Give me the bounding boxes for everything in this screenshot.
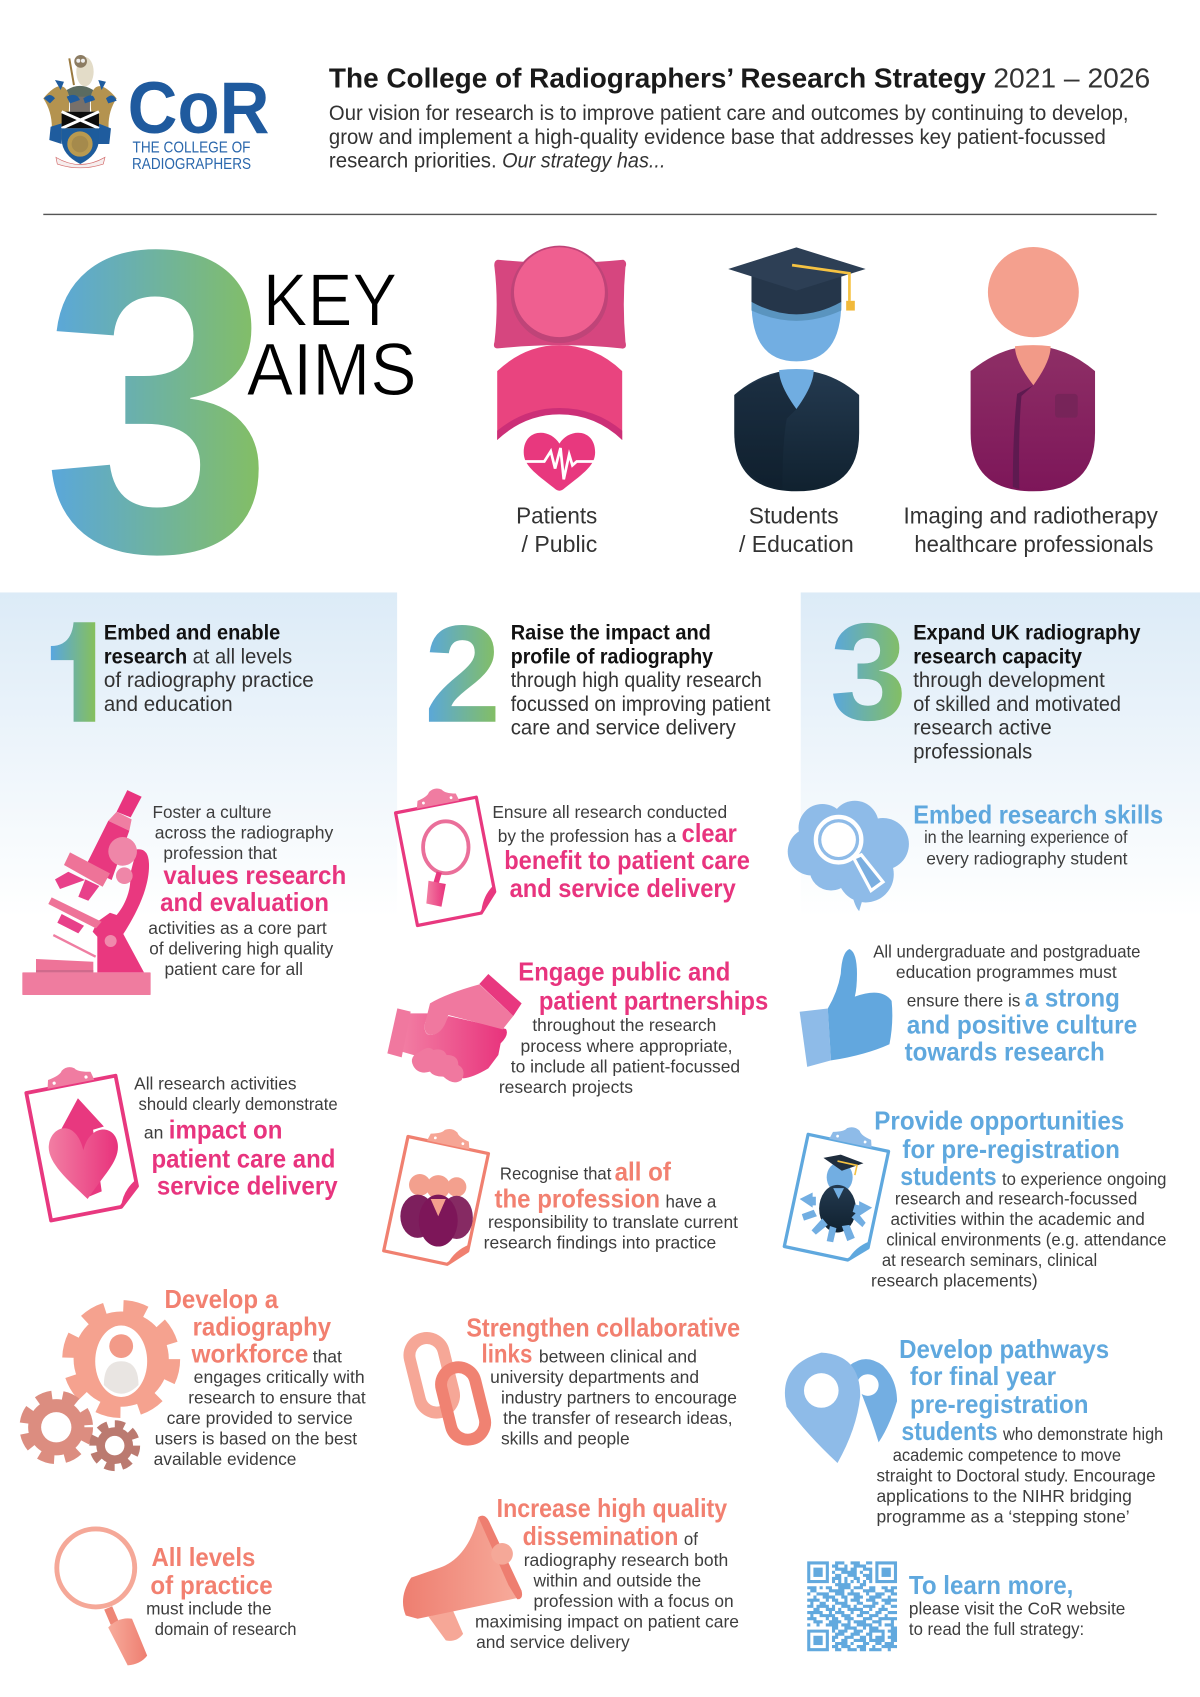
aim 2 text: care and service delivery <box>511 717 736 740</box>
aim 3 text: research active <box>913 717 1052 740</box>
item: increase high quality dissemination <box>403 1493 739 1652</box>
item: engage public and patient partnerships <box>387 956 768 1097</box>
text: all levels of practice: of practice <box>150 1570 273 1600</box>
text: develop a radiography workforce: radiography <box>193 1311 332 1341</box>
icon: graduate student <box>728 247 866 491</box>
text: clear benefit to patient care: clear <box>682 818 737 848</box>
icon: thumbs up <box>800 949 892 1067</box>
text: impact on patient care: service delivery <box>157 1171 338 1201</box>
text: increase high quality dissemination <box>475 1493 739 1652</box>
audience labels: / Public <box>522 531 597 557</box>
text: develop a radiography workforce: users is based on the best <box>155 1429 357 1449</box>
logo: College of Radiographers <box>43 55 269 173</box>
text: all of the profession: Recognise that <box>500 1163 612 1183</box>
text: clear benefit to patient care: Ensure all research conducted <box>492 802 727 822</box>
text: all levels of practice <box>146 1542 296 1639</box>
text: engage public and patient partnerships: patient partnerships <box>539 986 768 1016</box>
icon: map pins <box>785 1353 897 1463</box>
icon: gears with person <box>25 1307 173 1467</box>
item: all levels of practice <box>57 1529 296 1665</box>
item: learn more <box>807 1561 1125 1651</box>
item: opportunities for pre-registration students <box>784 1106 1166 1291</box>
text: opportunities for pre-registration students: activities within the academic and <box>891 1209 1145 1229</box>
icon: healthcare professional <box>971 247 1095 491</box>
text: increase high quality dissemination: within and outside the <box>532 1570 701 1590</box>
item: impact on patient care <box>23 1059 338 1220</box>
text: increase high quality dissemination: profession with a focus on <box>533 1591 734 1611</box>
text: strengthen collaborative links: industry partners to encourage <box>501 1387 737 1407</box>
heading: key aims <box>247 258 417 411</box>
text: opportunities for pre-registration students <box>871 1106 1166 1291</box>
text: engage public and patient partnerships: process where appropriate, <box>520 1036 733 1056</box>
text: clear benefit to patient care: benefit to patient care <box>504 845 750 875</box>
numeral 3: 3 <box>830 596 907 750</box>
text: increase high quality dissemination: of <box>684 1529 698 1549</box>
text: develop a radiography workforce <box>154 1284 366 1469</box>
text: develop pathways: for final year <box>910 1361 1056 1391</box>
text: strong and positive culture: ensure there is <box>907 990 1021 1010</box>
text: embed research skills: in the learning experience of <box>924 827 1128 847</box>
text: all of the profession: research findings into practice <box>484 1233 716 1253</box>
text: develop pathways: straight to Doctoral study. Encourage <box>876 1465 1156 1485</box>
vision text: grow and implement a high-quality evidence base that addresses key patient-focussed <box>329 126 1106 149</box>
text: all of the profession <box>484 1157 738 1253</box>
text: strong and positive culture: towards research <box>905 1036 1105 1066</box>
icon: microscope <box>22 790 151 995</box>
aim 1 text: research <box>104 645 187 668</box>
text: learn more <box>909 1570 1125 1639</box>
aim 3 <box>830 596 1141 764</box>
aim 3 text: professionals <box>913 741 1032 764</box>
title: The College of Radiographers’ Research Strategy <box>329 63 986 94</box>
text: develop pathways: who demonstrate high <box>1002 1424 1163 1444</box>
text: impact on patient care: an <box>144 1122 163 1142</box>
text: foster a culture: and evaluation <box>160 887 329 917</box>
text: engage public and patient partnerships: research projects <box>499 1077 633 1097</box>
vision text <box>329 102 1129 173</box>
text: opportunities for pre-registration students: to experience ongoing <box>1002 1169 1166 1189</box>
icon: heart with pulse <box>524 433 595 491</box>
aim 2 text: through high quality research <box>511 669 762 692</box>
icon: clipboard with graduate and arrows <box>784 1118 892 1264</box>
item: develop pathways <box>785 1334 1163 1526</box>
text: impact on patient care: All research activities <box>134 1074 297 1094</box>
text: all of the profession: the profession <box>494 1184 660 1214</box>
audience labels <box>516 503 1158 557</box>
title: 2021 – 2026 <box>993 63 1150 94</box>
text: foster a culture: across the radiography <box>155 823 334 843</box>
text: develop a radiography workforce: workforce <box>191 1338 308 1368</box>
text: all levels of practice: All levels <box>151 1542 255 1572</box>
aim 3 text <box>913 622 1141 764</box>
text: opportunities for pre-registration students: clinical environments (e.g. attendance <box>886 1229 1166 1249</box>
text: foster a culture: Foster a culture <box>153 802 272 822</box>
text: all of the profession: all of <box>615 1157 671 1187</box>
text: develop pathways: pre-registration <box>910 1389 1089 1419</box>
text: all levels of practice: must include the <box>146 1598 272 1618</box>
text: strong and positive culture <box>873 942 1140 1066</box>
text: opportunities for pre-registration students: Provide opportunities <box>874 1106 1124 1136</box>
aim 3 text: through development <box>913 669 1105 692</box>
icon: QR code <box>807 1561 897 1651</box>
text: engage public and patient partnerships: throughout the research <box>532 1015 716 1035</box>
aim 2 text: focussed on improving patient <box>511 693 771 716</box>
text: strengthen collaborative links: links <box>482 1338 532 1368</box>
college name: THE COLLEGE OF <box>133 140 250 157</box>
text: embed research skills: Embed research skills <box>913 799 1163 829</box>
aim 2 text: profile of radiography <box>511 645 713 668</box>
text: strengthen collaborative links <box>466 1312 740 1449</box>
audience labels: / Education <box>739 531 854 557</box>
text: strong and positive culture: education programmes must <box>896 962 1117 982</box>
item: foster a culture <box>22 790 346 995</box>
text: develop pathways <box>876 1334 1163 1526</box>
text: develop a radiography workforce: available evidence <box>154 1449 296 1469</box>
text: opportunities for pre-registration students: for pre-registration <box>902 1134 1120 1164</box>
aim 1 text: and education <box>104 693 233 716</box>
icon: magnifying glass <box>57 1529 147 1665</box>
text: foster a culture: profession that <box>163 843 277 863</box>
aim 3 text: of skilled and motivated <box>913 693 1121 716</box>
text: strong and positive culture: and positive culture <box>907 1009 1137 1039</box>
text: develop a radiography workforce: Develop a <box>164 1284 279 1314</box>
CoR wordmark: CoR <box>128 66 269 149</box>
text: foster a culture: values research <box>163 860 346 890</box>
college name: RADIOGRAPHERS <box>132 156 251 173</box>
aim 2 text: Raise the impact and <box>511 622 711 645</box>
text: strengthen collaborative links: Strengthen collaborative <box>466 1312 740 1342</box>
text: develop pathways: students <box>901 1416 998 1446</box>
icon: patient on pillow with heart <box>494 246 626 491</box>
item: strengthen collaborative links <box>406 1312 740 1449</box>
text: clear benefit to patient care <box>492 802 750 903</box>
aim 1 text: Embed and enable <box>104 622 281 645</box>
text: clear benefit to patient care: by the profession has a <box>498 826 677 846</box>
icon: megaphone <box>403 1516 522 1641</box>
text: strengthen collaborative links: skills and people <box>501 1429 630 1449</box>
text: increase high quality dissemination: radiography research both <box>524 1550 728 1570</box>
text: strengthen collaborative links: the transfer of research ideas, <box>503 1408 733 1428</box>
audience labels: Patients <box>516 503 597 529</box>
icon: chain links <box>406 1334 489 1443</box>
text: opportunities for pre-registration students: at research seminars, clinical <box>882 1250 1097 1270</box>
text: engage public and patient partnerships: to include all patient-focussed <box>511 1056 740 1076</box>
text: develop a radiography workforce: care provided to service <box>167 1408 353 1428</box>
text: increase high quality dissemination: maximising impact on patient care <box>475 1611 739 1631</box>
text: increase high quality dissemination: dissemination <box>523 1521 678 1551</box>
aim 1 <box>51 622 314 722</box>
text: learn more: To learn more, <box>909 1570 1073 1600</box>
aim 3 text: Expand UK radiography <box>913 622 1141 645</box>
text: all of the profession: responsibility to translate current <box>488 1212 738 1232</box>
icon: handshake <box>387 974 522 1082</box>
vision text: Our strategy has... <box>502 150 665 173</box>
text: embed research skills <box>913 799 1163 869</box>
numeral 2: 2 <box>424 598 501 752</box>
text: foster a culture: patient care for all <box>164 959 303 979</box>
text: foster a culture: activities as a core part <box>148 918 327 938</box>
item: clear benefit to patient care <box>392 781 750 925</box>
text: learn more: please visit the CoR website <box>909 1598 1125 1618</box>
text: engage public and patient partnerships: Engage public and <box>518 956 730 986</box>
text: develop pathways: academic competence to move <box>893 1445 1121 1465</box>
college name <box>132 140 251 173</box>
item: all of the profession <box>384 1121 738 1268</box>
text: foster a culture <box>148 802 346 979</box>
icon: coat of arms crest <box>43 55 117 168</box>
item: embed research skills <box>788 799 1163 911</box>
text: clear benefit to patient care: and service delivery <box>510 873 736 903</box>
text: strong and positive culture: a strong <box>1025 982 1120 1012</box>
text: embed research skills: every radiography student <box>926 849 1128 869</box>
vision text: research priorities. <box>329 150 497 173</box>
text: develop a radiography workforce: that <box>313 1346 342 1366</box>
audience labels: Students <box>749 503 839 529</box>
text: foster a culture: of delivering high quality <box>149 938 334 958</box>
text: develop pathways: applications to the NIHR bridging <box>876 1486 1132 1506</box>
text: increase high quality dissemination: Increase high quality <box>497 1493 728 1523</box>
heading and vision statement <box>329 63 1150 173</box>
text: engage public and patient partnerships <box>499 956 768 1097</box>
aim 3 text: research capacity <box>913 645 1082 668</box>
heading: key aims: KEY <box>263 258 397 342</box>
text: strengthen collaborative links: between clinical and <box>539 1346 697 1366</box>
item: develop a radiography workforce <box>25 1284 366 1469</box>
aim 2 <box>424 598 771 752</box>
text: develop pathways: Develop pathways <box>899 1334 1109 1364</box>
text: develop a radiography workforce: research to ensure that <box>188 1387 366 1407</box>
text: strengthen collaborative links: university departments and <box>490 1367 699 1387</box>
text: opportunities for pre-registration students: students <box>900 1161 997 1191</box>
text: all levels of practice: domain of research <box>155 1619 296 1639</box>
text: learn more: to read the full strategy: <box>909 1619 1084 1639</box>
text: strong and positive culture: All undergraduate and postgraduate <box>873 942 1140 962</box>
aim 2 text <box>511 622 771 740</box>
text: all of the profession: have a <box>665 1192 717 1212</box>
heading: key aims: AIMS <box>247 327 417 411</box>
icon: clipboard with magnifier <box>392 781 498 925</box>
text: increase high quality dissemination: and service delivery <box>476 1632 630 1652</box>
aim 1 text: at all levels <box>193 645 292 668</box>
text: impact on patient care: patient care and <box>151 1144 335 1174</box>
big number 3: 3 <box>42 161 274 643</box>
text: impact on patient care <box>134 1074 338 1201</box>
text: develop pathways: programme as a ‘stepping stone’ <box>876 1506 1130 1526</box>
icon: clipboard with professionals group <box>384 1121 492 1268</box>
numeral 1 <box>51 622 95 722</box>
item: strong and positive culture <box>800 942 1140 1067</box>
aim 1 text: of radiography practice <box>104 669 314 692</box>
audience labels: healthcare professionals <box>914 531 1153 557</box>
icon: clipboard with arrow and heart <box>23 1059 140 1220</box>
audience labels: Imaging and radiotherapy <box>904 503 1158 529</box>
aim 1 text <box>104 622 314 716</box>
icon: thought cloud with magnifier <box>788 801 909 911</box>
vision text: Our vision for research is to improve patient care and outcomes by continuing to develop, <box>329 102 1129 125</box>
text: impact on patient care: should clearly demonstrate <box>139 1094 338 1114</box>
text: develop a radiography workforce: engages critically with <box>194 1367 365 1387</box>
text: opportunities for pre-registration students: research and research-focussed <box>895 1188 1137 1208</box>
text: opportunities for pre-registration students: research placements) <box>871 1271 1038 1291</box>
text: impact on patient care: impact on <box>169 1114 282 1144</box>
